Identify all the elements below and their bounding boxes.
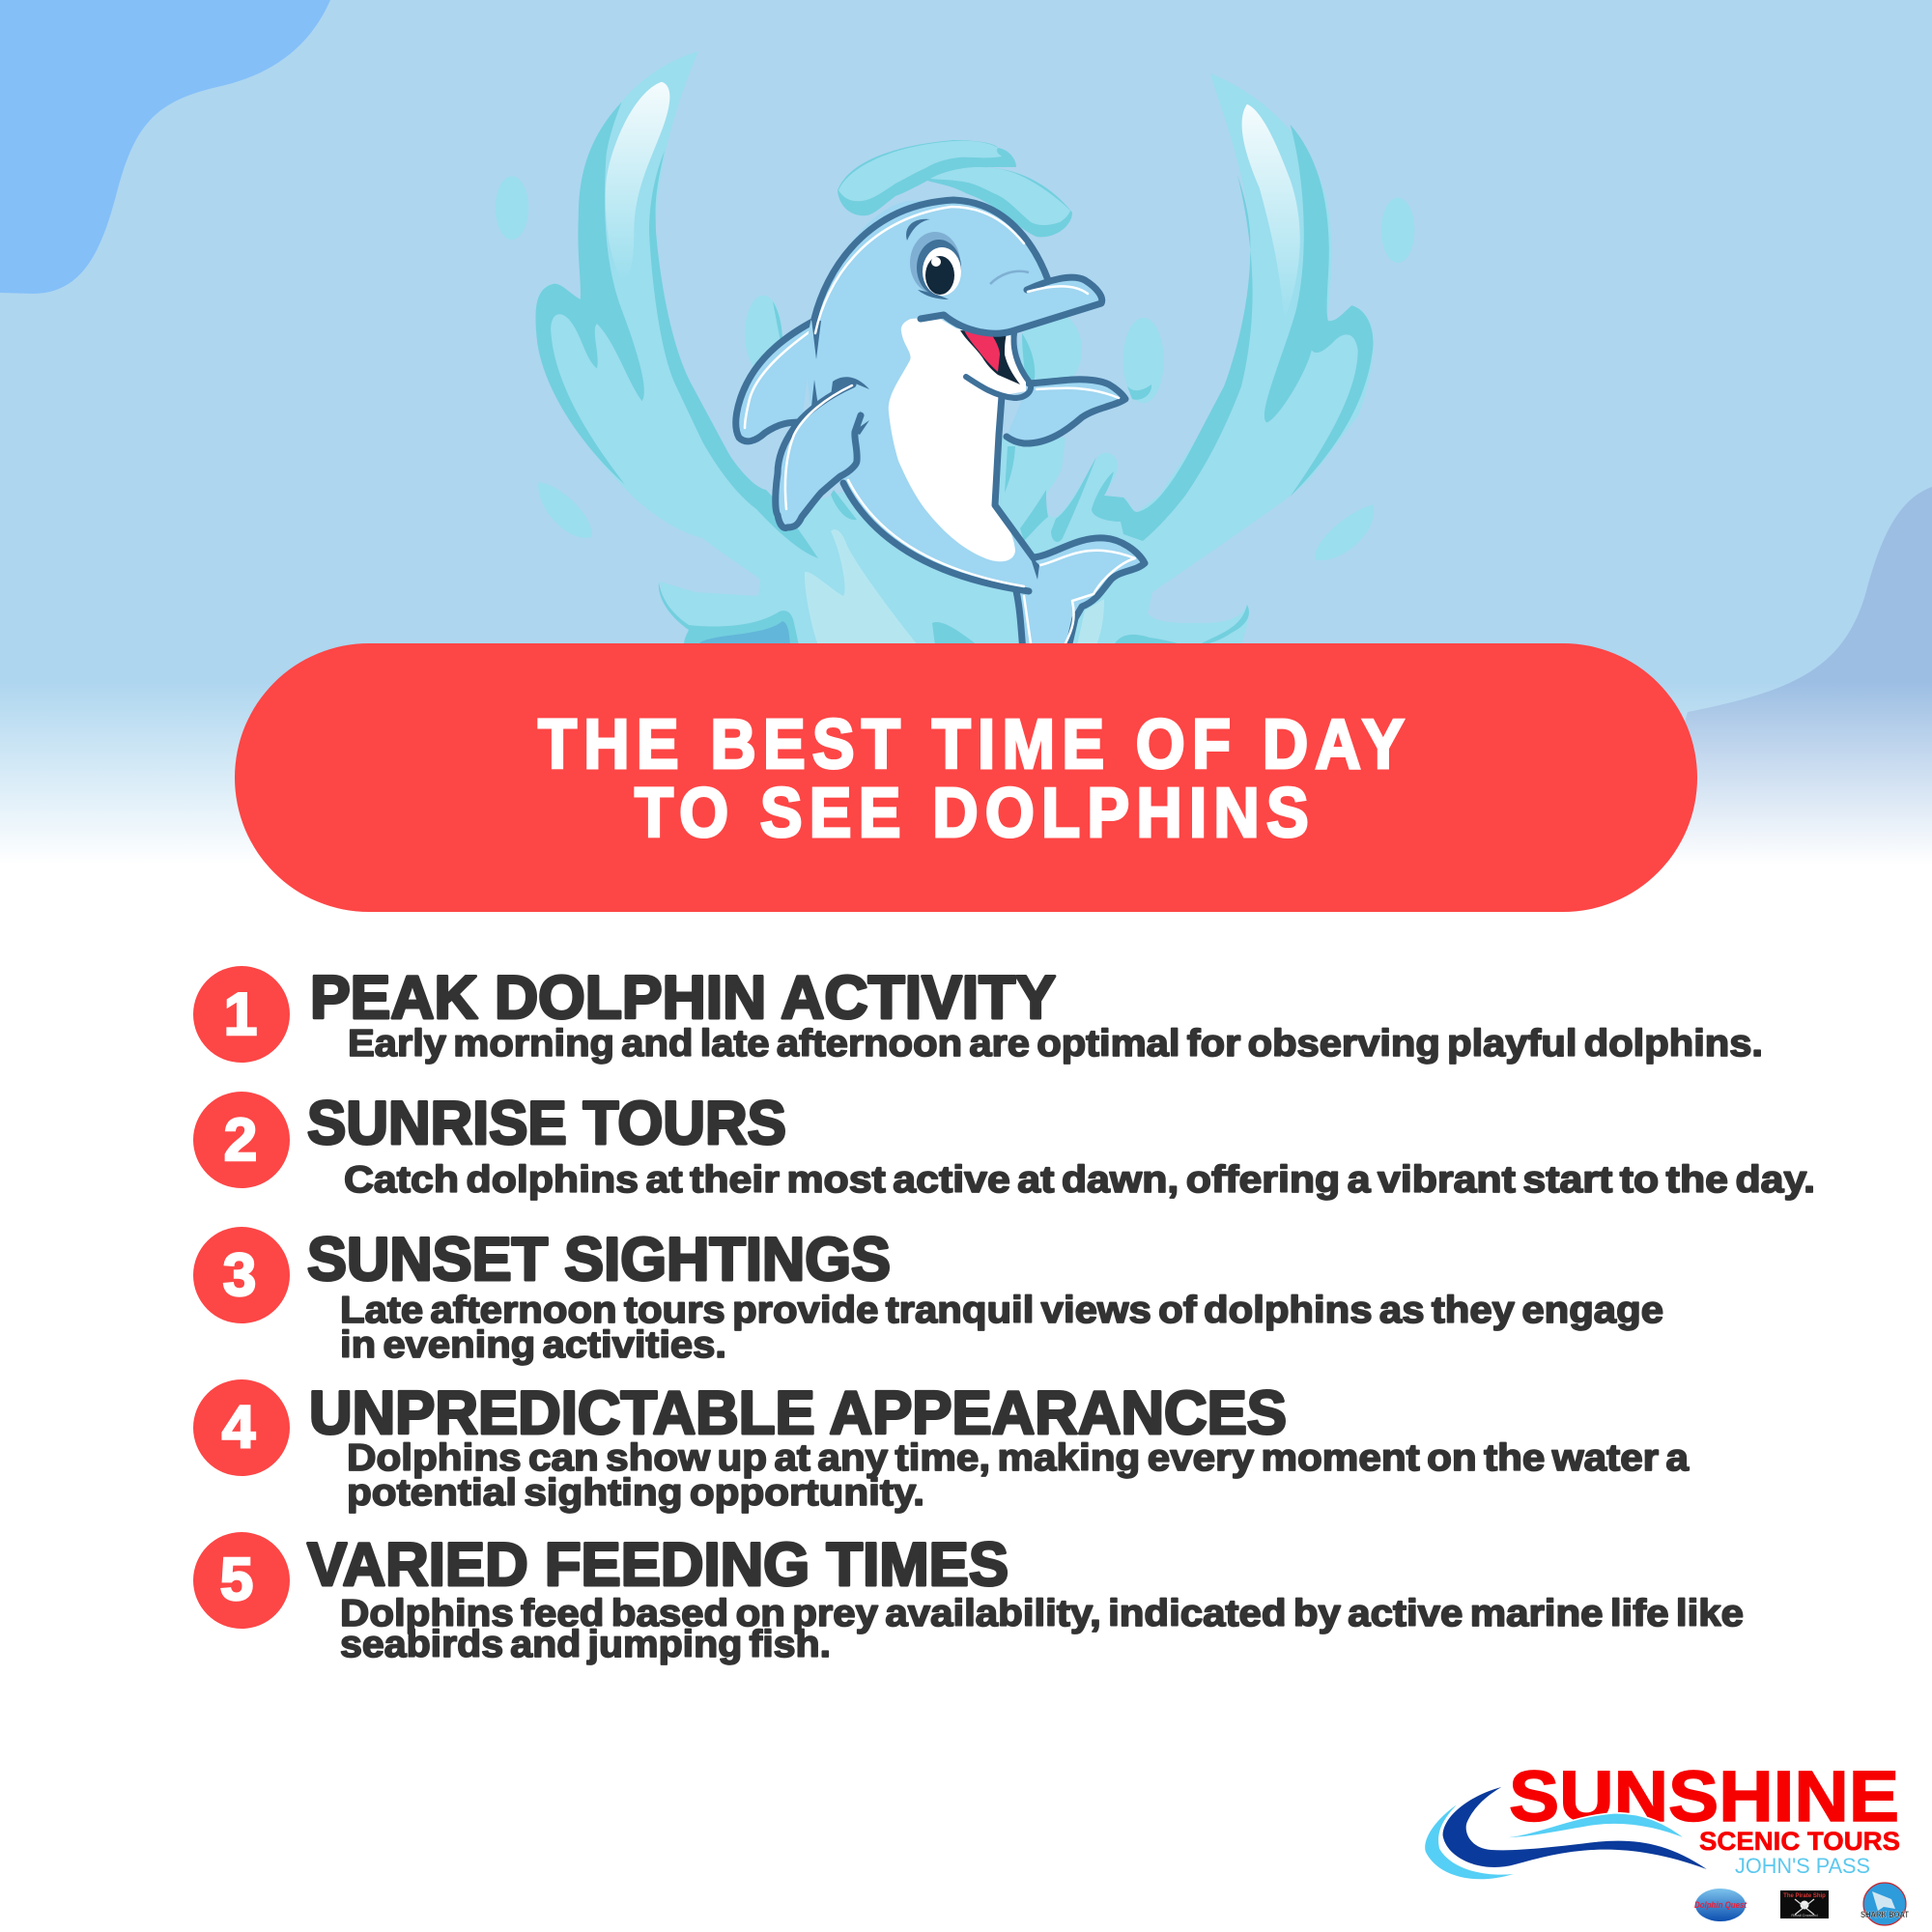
body 3: in evening activities. xyxy=(340,1324,726,1366)
near flipper crown xyxy=(831,377,869,435)
number badge 3: 3 xyxy=(223,1242,256,1309)
body 3 xyxy=(340,1290,1663,1366)
splash droplets xyxy=(496,176,1414,560)
item 5 xyxy=(193,1531,1744,1665)
eyebrow xyxy=(906,219,930,241)
right flipper highlight xyxy=(1037,388,1119,398)
heading 4: UNPREDICTABLE APPEARANCES xyxy=(309,1379,1287,1447)
near flipper highlight xyxy=(785,385,852,509)
body 5: Dolphins feed based on prey availability, indicated by active marine life like xyxy=(340,1593,1744,1634)
item 1 xyxy=(193,964,1763,1065)
number badge 4 xyxy=(193,1379,290,1476)
logo location: JOHN'S PASS xyxy=(1735,1854,1870,1878)
body 4: potential sighting opportunity. xyxy=(347,1472,924,1514)
belly xyxy=(889,317,1026,561)
tongue xyxy=(964,330,1000,372)
far flipper xyxy=(736,321,814,441)
lower jaw xyxy=(966,333,1031,398)
pupil xyxy=(925,256,954,295)
body 4: Dolphins can show up at any time, making every moment on the water a xyxy=(347,1437,1689,1479)
logo wordmark: SUNSHINE xyxy=(1509,1756,1899,1836)
water highlight right xyxy=(1242,104,1300,322)
droplet shading xyxy=(773,301,1151,400)
eye shadow xyxy=(910,232,960,294)
near flipper xyxy=(774,384,874,529)
logo: Sunshine Scenic Tours xyxy=(1425,1756,1909,1925)
heading 3: SUNSET SIGHTINGS xyxy=(307,1226,891,1293)
splash base xyxy=(536,51,1374,645)
eye xyxy=(910,232,961,299)
background blob top left xyxy=(0,0,330,294)
tail xyxy=(1016,538,1145,652)
right flipper xyxy=(1007,380,1125,443)
item 2 xyxy=(193,1090,1815,1201)
body 5 xyxy=(340,1593,1744,1665)
splash light streaks xyxy=(805,529,1104,645)
dolphin body xyxy=(807,200,1102,589)
background blob right xyxy=(1642,487,1932,869)
eye rim xyxy=(917,240,961,296)
rostrum highlight xyxy=(1028,286,1088,294)
title xyxy=(538,706,1411,852)
item 4 xyxy=(193,1379,1689,1514)
logo swoosh xyxy=(1425,1787,1707,1879)
item 3 xyxy=(193,1226,1663,1366)
eye white xyxy=(923,247,961,296)
splash pool xyxy=(697,621,790,645)
badge: Dolphin Quest xyxy=(1694,1889,1747,1921)
title banner xyxy=(235,643,1697,912)
splash inner shading xyxy=(649,151,1253,645)
eye glint xyxy=(931,257,941,267)
number badge 2 xyxy=(193,1092,290,1188)
mouth interior xyxy=(960,330,1020,384)
dolphin outlines xyxy=(811,200,1048,591)
number badge 3 xyxy=(193,1227,290,1323)
body 3: Late afternoon tours provide tranquil views of dolphins as they engage xyxy=(340,1290,1663,1331)
gradient fade to white xyxy=(0,681,1932,865)
crest upper light xyxy=(838,141,1002,201)
badge: Shark Boat: SHARK BOAT xyxy=(1861,1910,1909,1919)
number badge 2: 2 xyxy=(224,1107,257,1174)
mouth xyxy=(960,330,1031,398)
badge: The Pirate Ship xyxy=(1780,1890,1829,1918)
droplet behind jaw xyxy=(1020,311,1082,388)
badge: The Pirate Ship: The Pirate Ship xyxy=(1783,1893,1826,1899)
title: THE BEST TIME OF DAY xyxy=(538,706,1411,783)
number badge 1: 1 xyxy=(224,981,257,1048)
illustration: dolphin and water splash xyxy=(496,51,1414,652)
lower lid xyxy=(918,290,949,299)
crest right light xyxy=(930,167,1070,225)
number badge 1 xyxy=(193,966,290,1063)
badge: Shark Boat xyxy=(1861,1883,1909,1925)
heading 1: PEAK DOLPHIN ACTIVITY xyxy=(310,964,1056,1032)
cheek crease xyxy=(990,271,1029,284)
badge: The Pirate Ship: Retail Crowned xyxy=(1791,1913,1818,1918)
body 4 xyxy=(347,1437,1689,1514)
far flipper highlight xyxy=(745,330,811,428)
heading 2: SUNRISE TOURS xyxy=(307,1090,786,1157)
logo subtitle: SCENIC TOURS xyxy=(1699,1827,1900,1856)
splash outer shading xyxy=(535,102,1373,497)
water highlight left xyxy=(606,82,669,281)
crest splash above head xyxy=(838,140,1072,237)
title: TO SEE DOLPHINS xyxy=(635,775,1316,852)
badge: Dolphin Quest: Dolphin Quest xyxy=(1694,1900,1747,1910)
near flipper outline xyxy=(776,384,861,528)
rostrum xyxy=(921,277,1102,333)
banner pill xyxy=(235,643,1697,912)
body 1: Early morning and late afternoon are optimal for observing playful dolphins. xyxy=(348,1023,1763,1065)
body 2: Catch dolphins at their most active at dawn, offering a vibrant start to the day. xyxy=(344,1159,1815,1201)
tail highlights xyxy=(1024,551,1135,643)
heading 5: VARIED FEEDING TIMES xyxy=(307,1531,1009,1599)
crest dark layer xyxy=(838,140,1072,237)
body 5: seabirds and jumping fish. xyxy=(340,1624,831,1665)
number badge 5 xyxy=(193,1532,290,1629)
number badge 4: 4 xyxy=(222,1394,256,1461)
number badge 5: 5 xyxy=(220,1547,253,1613)
